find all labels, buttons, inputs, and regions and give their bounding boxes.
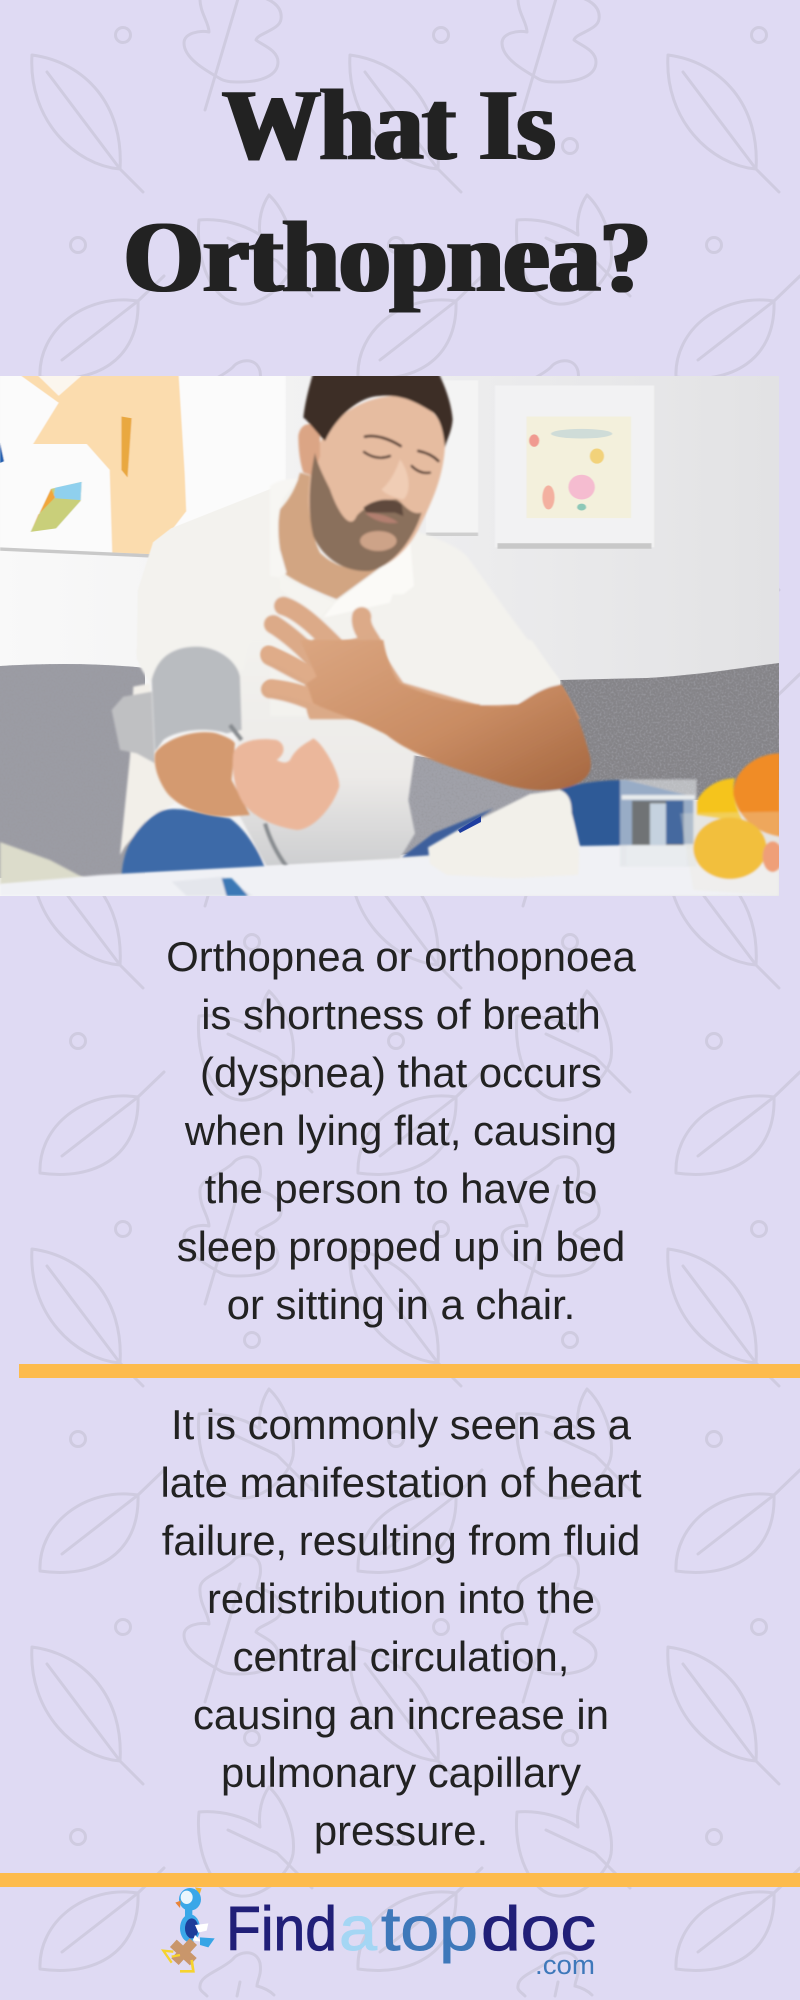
blood pressure monitor	[428, 790, 579, 878]
wordmark: a	[339, 1895, 378, 1964]
title	[124, 69, 651, 314]
left shirt sleeve and shoulder	[137, 477, 306, 714]
papers on table	[172, 877, 253, 896]
paragraph 2: failure, resulting from fluid	[162, 1517, 640, 1564]
paragraph 2: It is commonly seen as a	[171, 1401, 631, 1448]
wordmark	[226, 1895, 596, 1980]
paragraph 1: or sitting in a chair.	[227, 1281, 575, 1328]
grey sofa	[0, 663, 779, 878]
lemon	[697, 778, 743, 822]
paragraph 2: central circulation,	[233, 1633, 569, 1680]
title: Orthopnea?	[124, 201, 651, 314]
paragraph 1: sleep propped up in bed	[177, 1223, 625, 1270]
framed pictures on wall	[426, 380, 654, 549]
fingertips, left forearm and left hand	[155, 653, 339, 830]
paragraph 1: is shortness of breath	[201, 991, 601, 1038]
right forearm and elbow	[300, 640, 591, 790]
wordmark: top	[381, 1895, 478, 1964]
paragraph 2: late manifestation of heart	[161, 1459, 641, 1506]
title: What Is	[223, 69, 555, 182]
photo: man holding his chest while measuring blood pressure on a sofa	[0, 376, 779, 896]
head and upper body	[270, 373, 580, 719]
orange	[733, 753, 780, 837]
painting on left wall	[0, 373, 286, 558]
beard	[310, 453, 422, 571]
sleeve	[480, 640, 562, 705]
paragraph 2: pulmonary capillary	[221, 1749, 581, 1796]
pillow	[0, 842, 88, 885]
hair	[303, 373, 453, 448]
blood pressure cuff	[152, 647, 242, 752]
nose	[382, 459, 409, 499]
jeans	[560, 780, 693, 846]
eyes and brows	[364, 436, 438, 473]
ear	[298, 424, 320, 476]
wall art, drawn in stretched coordinates	[0, 373, 654, 558]
left hand	[233, 738, 339, 830]
lower torso, jeans, cuff and left arm	[112, 638, 493, 875]
collar	[270, 479, 298, 578]
paragraph 1: when lying flat, causing	[185, 1107, 617, 1154]
left forearm	[155, 732, 250, 817]
paragraph 2: pressure.	[314, 1807, 488, 1854]
table	[0, 845, 779, 896]
paragraph 1: (dyspnea) that occurs	[200, 1049, 602, 1096]
glass	[620, 779, 697, 867]
face	[308, 396, 445, 571]
icon: duck mascot with bandage	[163, 1887, 215, 1971]
wordmark: .com	[535, 1950, 595, 1980]
right side: sleeve, arm, jeans, monitor, glass and fruit	[300, 640, 783, 896]
cuff tab	[112, 692, 155, 763]
cable	[230, 725, 287, 867]
paragraph 2: redistribution into the	[207, 1575, 595, 1622]
wordmark: doc	[481, 1895, 596, 1964]
wall	[0, 376, 779, 896]
shirt	[270, 531, 560, 716]
neck	[278, 473, 380, 599]
divider bar 1	[19, 1364, 800, 1378]
paragraph 1	[166, 933, 636, 1328]
paragraph 2: causing an increase in	[193, 1691, 609, 1738]
paragraph 1: Orthopnea or orthopnoea	[166, 933, 636, 980]
glass bowl	[680, 812, 779, 896]
blue label on monitor	[458, 816, 481, 833]
knee jeans	[122, 809, 265, 875]
right upper arm segment	[517, 684, 580, 719]
paragraph 2	[161, 1401, 642, 1854]
wordmark: Find	[226, 1895, 337, 1964]
right knee jeans	[402, 808, 493, 857]
hand on chest	[270, 606, 372, 703]
divider bar 2	[0, 1873, 800, 1887]
paragraph 1: the person to have to	[205, 1165, 597, 1212]
